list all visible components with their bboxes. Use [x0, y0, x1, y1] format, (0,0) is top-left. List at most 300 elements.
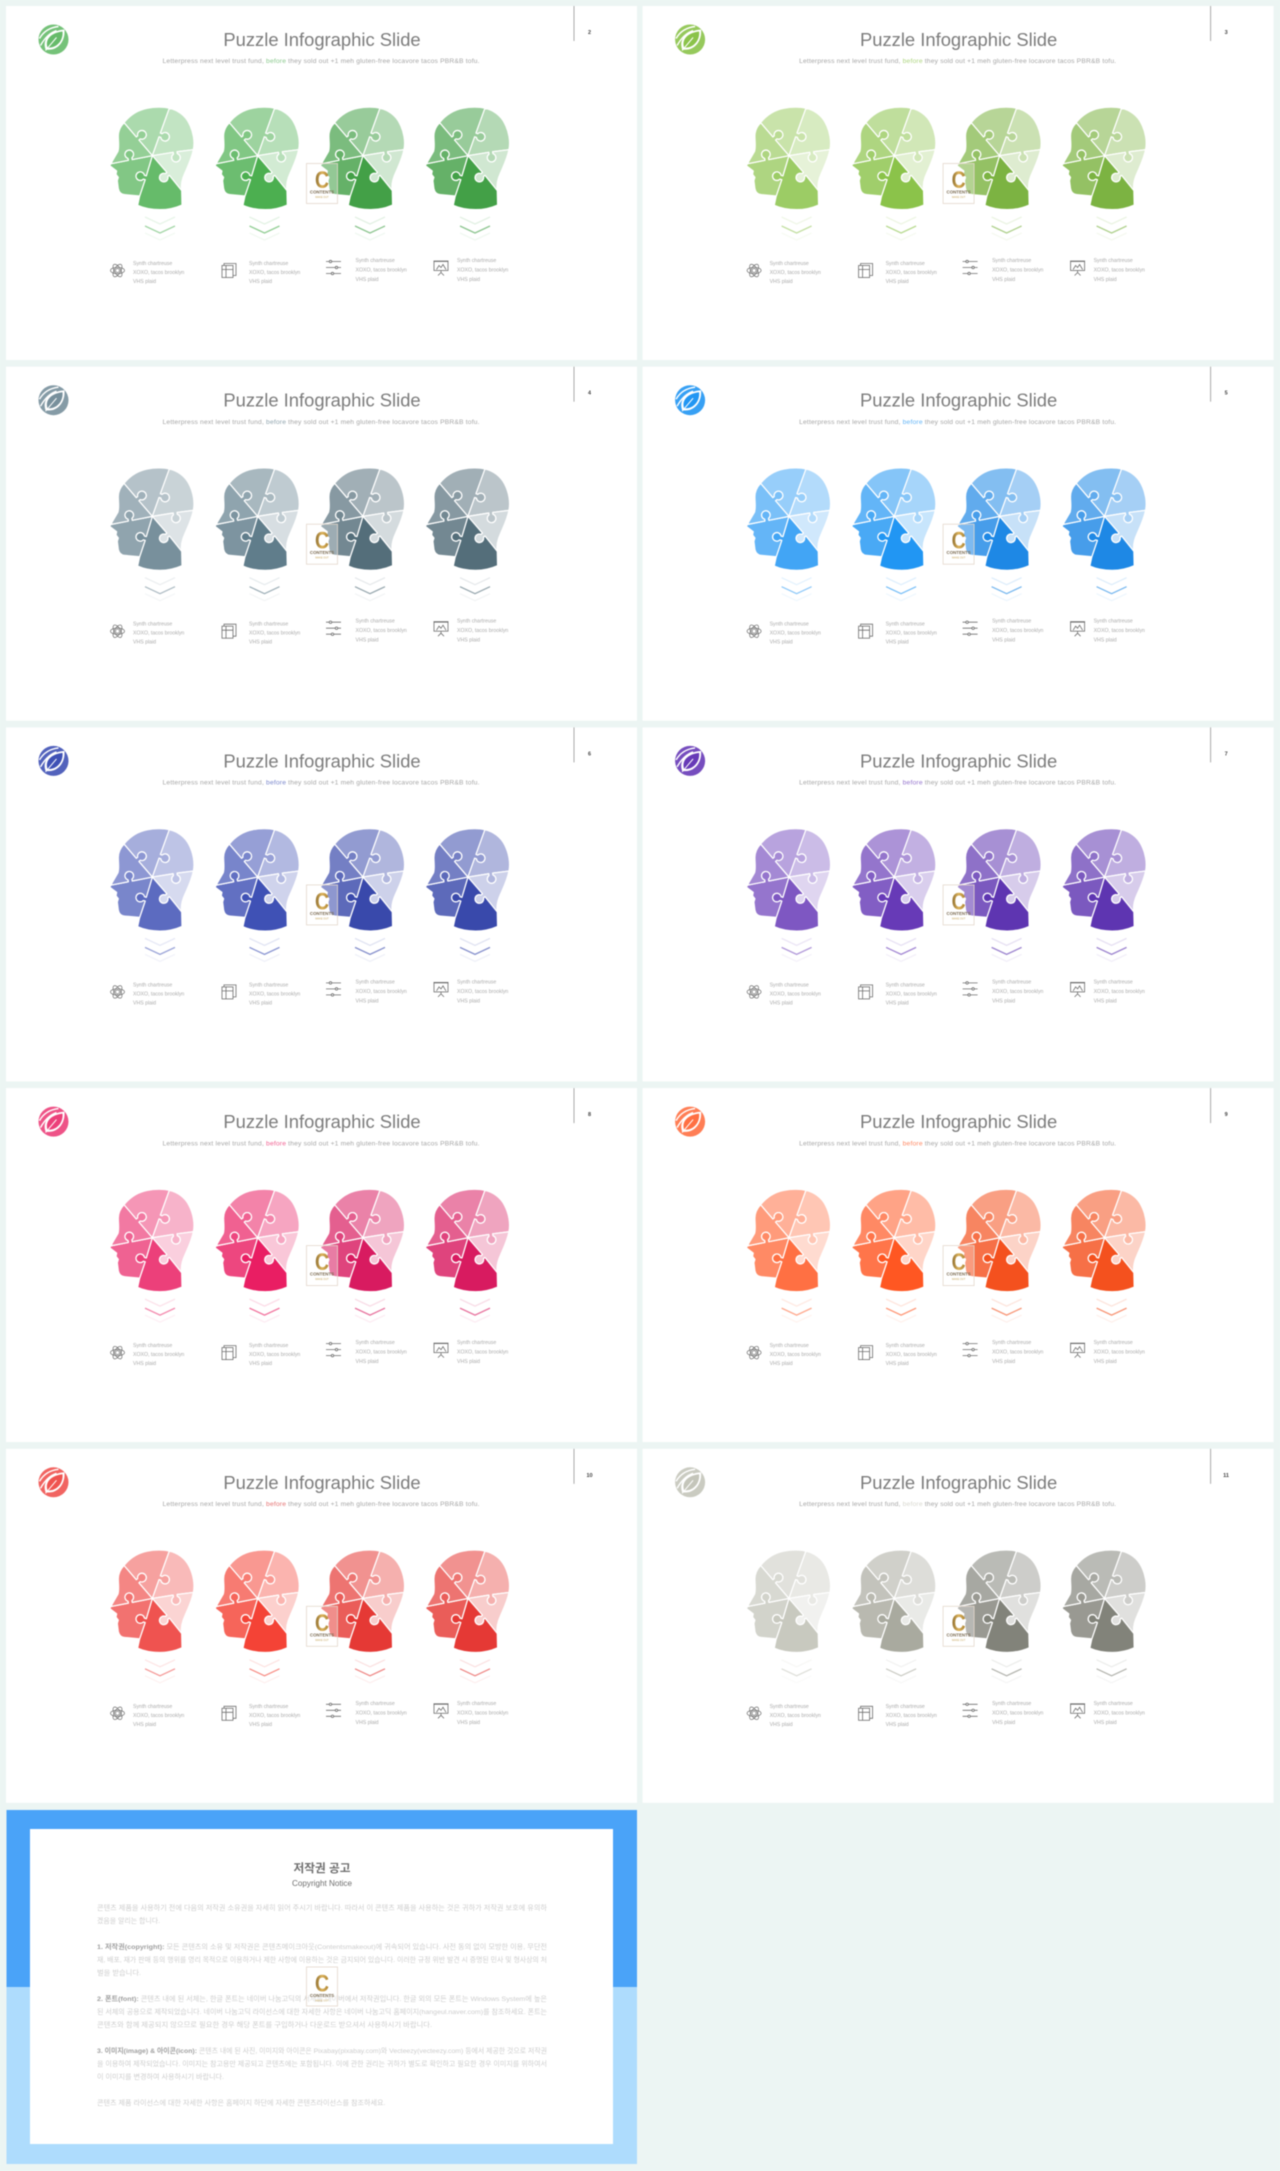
feature text 3: VHS plaid: [356, 1720, 379, 1726]
icon: leaf logo: [675, 1107, 705, 1137]
section 2 font: 2. 폰트(font): 콘텐츠 내에 된 서체는, 한글 폰트는 네이버 나눔고딕의 서체를 네이버에서 저작권입니다. 한글 외의 모든 폰트는 Windows System에 높은: [97, 1994, 547, 2003]
feature text 2: Synth chartreuse: [249, 982, 288, 988]
icon: presentation board: [1070, 1343, 1085, 1358]
feature text 3: Synth chartreuse: [356, 619, 395, 625]
feature text 2: XOXO, tacos brooklyn: [886, 1713, 937, 1719]
watermark: [943, 885, 974, 925]
head 3: [957, 829, 1041, 931]
section 1 copyright: 재, 배포, 재가 판매 등의 행위를 영리 목적으로 이용하거나 제한 사항에 이용하는 것은 금지되어 있습니다. 이러한 규정 위반 발견 시 증명된 민사 및 형사상의 처: [97, 1955, 547, 1964]
icon: presentation board: [434, 1704, 448, 1718]
panel: green slide, page 2: [6, 6, 637, 360]
subtitle: Letterpress next level trust fund, before they sold out +1 meh gluten-free locavore tacos PBR&B tofu.: [799, 1501, 1116, 1508]
subtitle: Letterpress next level trust fund, before they sold out +1 meh gluten-free locavore tacos PBR&B tofu.: [799, 780, 1116, 787]
title: Puzzle Infographic Slide: [860, 1472, 1057, 1493]
head 2: [215, 1189, 299, 1292]
feature text 2: XOXO, tacos brooklyn: [886, 1352, 937, 1358]
subtitle: Letterpress next level trust fund, before they sold out +1 meh gluten-free locavore tacos PBR&B tofu.: [799, 1140, 1116, 1147]
icon: atom: [747, 1706, 761, 1721]
head 1: [747, 1550, 831, 1652]
notice heading: 저작권 공고: [294, 1861, 351, 1875]
feature text 1: XOXO, tacos brooklyn: [770, 270, 821, 276]
head 1: [747, 829, 831, 931]
watermark: CONTENTS: [947, 1272, 971, 1277]
feature text 2: VHS plaid: [249, 640, 272, 646]
icon: atom: [747, 263, 761, 278]
panel: indigo slide, page 6: [6, 727, 637, 1081]
page number: 5: [1225, 391, 1228, 397]
icon: leaf logo: [675, 385, 705, 415]
section 3 image and icon: 3. 이미지(image) & 아이콘(icon): 콘텐츠 내에 된 사진, 이미지와 아이콘은 Pixabay(pixabay.com)와 Vecteezy(vecteezy.com) 등에서 제공한 것으로 저작권: [97, 2046, 547, 2055]
puzzle heads: [747, 1189, 1146, 1292]
feature text 2: VHS plaid: [886, 1361, 909, 1367]
icon: sliders: [326, 260, 341, 275]
icon: presentation board: [434, 261, 448, 276]
notice intro: 콘텐츠 제품을 사용하기 전에 다음의 저작권 소유권을 자세히 읽어 주시기 바랍니다. 따라서 이 콘텐츠 제품을 사용하는 것은 귀하가 저작권 보호에 유의하: [97, 1903, 548, 1912]
feature text 1: XOXO, tacos brooklyn: [133, 631, 184, 637]
feature text 3: XOXO, tacos brooklyn: [356, 1350, 407, 1356]
watermark: C: [952, 528, 966, 555]
watermark: CONTENTS: [947, 911, 971, 916]
feature text 1: VHS plaid: [133, 1361, 156, 1367]
feature text 3: Synth chartreuse: [992, 1340, 1031, 1346]
icon: atom: [747, 1345, 761, 1360]
watermark: [306, 885, 338, 925]
feature text 2: VHS plaid: [886, 279, 909, 285]
head 2: [852, 829, 936, 931]
feature text 2: Synth chartreuse: [886, 1343, 925, 1349]
icon: layers: [222, 1346, 236, 1360]
feature text 1: Synth chartreuse: [133, 1704, 172, 1710]
feature text 3: XOXO, tacos brooklyn: [992, 1350, 1044, 1356]
feature text 1: VHS plaid: [770, 279, 793, 285]
page marker bar: [574, 1449, 575, 1484]
head 4: [426, 829, 510, 931]
feature text 4: Synth chartreuse: [457, 1340, 496, 1346]
feature text 3: VHS plaid: [992, 998, 1015, 1004]
feature text 3: XOXO, tacos brooklyn: [992, 1710, 1044, 1716]
icon: leaf logo: [675, 746, 705, 776]
chevrons: [782, 1660, 1127, 1683]
title: Puzzle Infographic Slide: [860, 1111, 1057, 1132]
feature text 2: Synth chartreuse: [249, 622, 288, 628]
watermark: MAKE OUT: [315, 556, 329, 560]
section 1 copyright: 1. 저작권(copyright): 모든 콘텐츠의 소유 및 저작권은 콘텐츠메이크아웃(Contentsmakeout)에 귀속되어 있습니다. 사전 동의 없이 모방한 이용, 무단전: [97, 1942, 547, 1951]
feature text 1: Synth chartreuse: [133, 1343, 172, 1349]
icon: atom: [110, 263, 124, 278]
feature text 4: VHS plaid: [457, 277, 480, 283]
puzzle heads: [747, 107, 1146, 210]
feature text 2: VHS plaid: [249, 1722, 272, 1728]
subtitle: Letterpress next level trust fund, before they sold out +1 meh gluten-free locavore tacos PBR&B tofu.: [162, 58, 480, 65]
feature text 4: VHS plaid: [1094, 638, 1117, 644]
feature text 2: Synth chartreuse: [886, 1704, 925, 1710]
watermark: [306, 1606, 338, 1646]
head 1: [110, 1189, 194, 1292]
title: Puzzle Infographic Slide: [223, 1472, 421, 1493]
feature text 1: VHS plaid: [770, 640, 793, 646]
feature text 1: VHS plaid: [133, 1722, 156, 1728]
head 2: [852, 1550, 936, 1652]
feature text 2: Synth chartreuse: [886, 261, 925, 267]
watermark: MAKE OUT: [952, 195, 966, 199]
icon: sliders: [963, 621, 978, 635]
feature text 1: Synth chartreuse: [133, 982, 172, 988]
feature text 3: Synth chartreuse: [992, 1701, 1031, 1707]
head 4: [1062, 468, 1146, 570]
feature text 3: Synth chartreuse: [356, 979, 395, 985]
icon: layers: [859, 1706, 873, 1720]
icon: atom: [747, 984, 761, 1000]
feature text 4: VHS plaid: [1094, 277, 1117, 283]
watermark: MAKE OUT: [952, 916, 966, 920]
feature text 3: VHS plaid: [356, 998, 379, 1004]
watermark: C: [315, 167, 329, 194]
feature text 1: Synth chartreuse: [770, 622, 809, 628]
feature text 4: XOXO, tacos brooklyn: [457, 268, 508, 274]
watermark: C: [952, 167, 966, 194]
icon: leaf logo: [675, 1467, 705, 1497]
head 1: [747, 1189, 831, 1292]
head 4: [426, 1550, 510, 1652]
icon: sliders: [326, 1342, 341, 1357]
feature text 4: VHS plaid: [1094, 1359, 1117, 1365]
page marker bar: [1210, 1449, 1211, 1484]
feature text 1: Synth chartreuse: [770, 1343, 809, 1349]
chevrons: [145, 938, 490, 961]
feature text 2: XOXO, tacos brooklyn: [249, 1352, 300, 1358]
watermark: MAKE OUT: [315, 1998, 329, 2002]
icon: sliders: [963, 1703, 978, 1718]
icon: presentation board: [434, 622, 448, 636]
chevrons: [782, 578, 1127, 601]
feature text 1: VHS plaid: [133, 279, 156, 285]
head 4: [426, 468, 510, 570]
subtitle: Letterpress next level trust fund, before they sold out +1 meh gluten-free locavore tacos PBR&B tofu.: [162, 419, 480, 426]
icon: presentation board: [1070, 1704, 1085, 1718]
watermark: [943, 164, 974, 204]
watermark: MAKE OUT: [315, 916, 329, 920]
feature text 4: XOXO, tacos brooklyn: [457, 628, 508, 634]
icon: sliders: [326, 1703, 341, 1718]
watermark: CONTENTS: [310, 1993, 334, 1998]
feature text 4: XOXO, tacos brooklyn: [457, 989, 508, 995]
feature text 1: XOXO, tacos brooklyn: [133, 270, 184, 276]
icon: layers: [222, 1706, 236, 1720]
notice intro line 2: 겠음을 알리는 합니다.: [97, 1916, 160, 1925]
watermark: [306, 1967, 338, 2006]
feature text 4: XOXO, tacos brooklyn: [457, 1350, 508, 1356]
page marker bar: [1210, 367, 1211, 402]
icon: layers: [222, 985, 236, 999]
subtitle: Letterpress next level trust fund, before they sold out +1 meh gluten-free locavore tacos PBR&B tofu.: [162, 780, 480, 787]
feature text 1: Synth chartreuse: [770, 261, 809, 267]
icon: sliders: [326, 982, 341, 996]
head 4: [1062, 1550, 1146, 1652]
panel: purple slide, page 7: [643, 727, 1274, 1081]
feature text 2: XOXO, tacos brooklyn: [886, 631, 937, 637]
watermark: MAKE OUT: [952, 1277, 966, 1281]
head 4: [1062, 1189, 1146, 1292]
feature text 3: VHS plaid: [992, 1720, 1015, 1726]
head 1: [110, 1550, 194, 1652]
panel: blue slide, page 5: [643, 367, 1274, 721]
page number: 2: [588, 30, 591, 36]
page marker bar: [1210, 6, 1211, 41]
feature text 2: Synth chartreuse: [886, 982, 925, 988]
notice closing line: 콘텐츠 제품 라이선스에 대한 자세한 사항은 홈페이지 하단에 자세한 콘텐츠라이선스를 참조하세요.: [97, 2098, 386, 2107]
feature text 3: Synth chartreuse: [992, 258, 1031, 264]
head 1: [747, 468, 831, 570]
watermark: CONTENTS: [310, 1632, 334, 1637]
chevrons: [782, 938, 1127, 961]
puzzle heads: [747, 468, 1146, 570]
head 2: [215, 829, 299, 931]
watermark: MAKE OUT: [952, 556, 966, 560]
section 2 font: 된 서체의 공용으로 제작되었습니다. 네이버 나눔고딕 라이선스에 대한 자세한 사항은 네이버 나눔고딕 홈페이지(hangeul.naver.com)를 참조하세요. 폰트는: [97, 2007, 547, 2016]
icon: atom: [110, 1706, 124, 1721]
head 3: [957, 1189, 1041, 1292]
feature text 3: XOXO, tacos brooklyn: [992, 989, 1044, 995]
feature text 3: VHS plaid: [356, 277, 379, 283]
title: Puzzle Infographic Slide: [223, 1111, 421, 1132]
chevrons: [145, 1299, 490, 1322]
feature text 2: VHS plaid: [886, 1722, 909, 1728]
icon: atom: [110, 1345, 124, 1360]
subtitle: Letterpress next level trust fund, before they sold out +1 meh gluten-free locavore tacos PBR&B tofu.: [162, 1140, 480, 1147]
icon: presentation board: [1070, 622, 1085, 636]
panel: pink slide, page 8: [6, 1088, 637, 1442]
head 3: [321, 1189, 405, 1292]
head 4: [1062, 829, 1146, 931]
page number: 10: [586, 1473, 593, 1479]
feature text 4: Synth chartreuse: [457, 1701, 496, 1707]
feature text 1: Synth chartreuse: [770, 982, 809, 988]
page marker bar: [574, 6, 575, 41]
icon: presentation board: [434, 1343, 448, 1358]
feature text 1: VHS plaid: [133, 1000, 156, 1006]
head 1: [747, 107, 831, 210]
icon: layers: [859, 985, 873, 999]
head 3: [321, 829, 405, 931]
icon: atom: [110, 984, 124, 1000]
watermark: C: [315, 888, 329, 915]
watermark: CONTENTS: [947, 1632, 971, 1637]
watermark: C: [315, 1249, 329, 1276]
head 2: [852, 1189, 936, 1292]
panel: light green slide, page 3: [643, 6, 1274, 360]
feature text 1: XOXO, tacos brooklyn: [133, 1352, 184, 1358]
feature text 2: XOXO, tacos brooklyn: [249, 631, 300, 637]
watermark: C: [952, 888, 966, 915]
feature text 1: XOXO, tacos brooklyn: [133, 1713, 184, 1719]
feature text 4: Synth chartreuse: [457, 619, 496, 625]
feature text 4: XOXO, tacos brooklyn: [1094, 1710, 1145, 1716]
head 2: [215, 1550, 299, 1652]
icon: presentation board: [1070, 261, 1085, 276]
icon: sliders: [963, 982, 978, 996]
feature text 4: Synth chartreuse: [1094, 619, 1133, 625]
head 4: [426, 107, 510, 210]
title: Puzzle Infographic Slide: [223, 750, 421, 771]
feature text 4: Synth chartreuse: [457, 258, 496, 264]
feature text 2: Synth chartreuse: [249, 1704, 288, 1710]
watermark: CONTENTS: [310, 550, 334, 555]
subtitle: Letterpress next level trust fund, before they sold out +1 meh gluten-free locavore tacos PBR&B tofu.: [799, 419, 1116, 426]
head 3: [957, 468, 1041, 570]
feature text 1: VHS plaid: [770, 1361, 793, 1367]
icon: layers: [859, 1346, 873, 1360]
feature text 4: Synth chartreuse: [1094, 258, 1133, 264]
feature text 4: VHS plaid: [457, 1720, 480, 1726]
feature text 3: XOXO, tacos brooklyn: [356, 989, 407, 995]
panel: blue-gray slide, page 4: [6, 367, 637, 721]
page number: 4: [588, 391, 592, 397]
watermark: [943, 524, 974, 564]
feature text 1: Synth chartreuse: [133, 261, 172, 267]
chevrons: [782, 1299, 1127, 1322]
head 1: [110, 829, 194, 931]
section 1 copyright: [97, 1942, 547, 1977]
feature text 3: XOXO, tacos brooklyn: [356, 628, 407, 634]
title: Puzzle Infographic Slide: [860, 750, 1057, 771]
head 1: [110, 107, 194, 210]
section 2 font: [97, 1994, 547, 2029]
feature text 2: VHS plaid: [249, 279, 272, 285]
page number: 8: [588, 1112, 591, 1118]
feature text 2: Synth chartreuse: [886, 622, 925, 628]
feature text 4: Synth chartreuse: [1094, 1340, 1133, 1346]
feature text 1: XOXO, tacos brooklyn: [770, 1352, 821, 1358]
page number: 7: [1225, 751, 1228, 757]
feature text 3: Synth chartreuse: [356, 1340, 395, 1346]
puzzle heads: [110, 468, 510, 570]
feature text 4: VHS plaid: [1094, 1720, 1117, 1726]
feature text 2: XOXO, tacos brooklyn: [886, 270, 937, 276]
icon: leaf logo: [38, 24, 68, 54]
feature text 3: VHS plaid: [992, 638, 1015, 644]
icon: presentation board: [1070, 982, 1085, 997]
subtitle: Letterpress next level trust fund, before they sold out +1 meh gluten-free locavore tacos PBR&B tofu.: [162, 1501, 480, 1508]
feature text 4: XOXO, tacos brooklyn: [1094, 1350, 1145, 1356]
feature text 3: XOXO, tacos brooklyn: [356, 1710, 407, 1716]
watermark: MAKE OUT: [315, 1277, 329, 1281]
title: Puzzle Infographic Slide: [860, 390, 1057, 411]
feature text 4: VHS plaid: [457, 1359, 480, 1365]
feature text 2: XOXO, tacos brooklyn: [249, 991, 300, 997]
head 3: [321, 1550, 405, 1652]
puzzle heads: [747, 1550, 1146, 1652]
panel: orange slide, page 9: [643, 1088, 1274, 1442]
feature text 4: VHS plaid: [1094, 998, 1117, 1004]
watermark: CONTENTS: [310, 911, 334, 916]
feature text 2: XOXO, tacos brooklyn: [886, 991, 937, 997]
watermark: CONTENTS: [947, 190, 971, 194]
feature text 2: VHS plaid: [249, 1361, 272, 1367]
feature text 4: Synth chartreuse: [1094, 1701, 1133, 1707]
section 3 image and icon: 이 이미지를 변경하여 사용하시기 바랍니다.: [97, 2072, 224, 2081]
feature text 4: Synth chartreuse: [1094, 979, 1133, 985]
notice subheading: Copyright Notice: [292, 1878, 352, 1888]
feature text 2: Synth chartreuse: [249, 1343, 288, 1349]
feature text 2: XOXO, tacos brooklyn: [249, 270, 300, 276]
feature text 1: Synth chartreuse: [133, 622, 172, 628]
section 1 copyright: 벌을 받습니다.: [97, 1968, 141, 1977]
watermark: [306, 524, 338, 564]
feature text 1: XOXO, tacos brooklyn: [770, 1713, 821, 1719]
watermark: [306, 1246, 338, 1286]
feature text 3: XOXO, tacos brooklyn: [356, 268, 407, 274]
page number: 11: [1223, 1473, 1229, 1479]
feature text 1: VHS plaid: [133, 640, 156, 646]
icon: layers: [859, 264, 873, 278]
head 2: [852, 468, 936, 570]
watermark: C: [952, 1249, 966, 1276]
icon: leaf logo: [675, 24, 705, 54]
puzzle heads: [110, 1550, 510, 1652]
page marker bar: [1210, 727, 1211, 762]
panel: red slide, page 10: [6, 1449, 637, 1803]
feature text 4: XOXO, tacos brooklyn: [457, 1710, 508, 1716]
watermark: MAKE OUT: [315, 1638, 329, 1642]
section 3 image and icon: 을 이용하여 제작되었습니다. 이미지는 참고용만 제공되고 콘텐츠에는 포함됩니다. 이에 관한 권리는 귀하가 별도로 확인하고 필요한 경우 이미지를 위하여서: [97, 2059, 547, 2068]
title: Puzzle Infographic Slide: [860, 29, 1057, 50]
chevrons: [782, 217, 1127, 240]
icon: sliders: [963, 260, 978, 275]
page number: 6: [588, 751, 591, 757]
page marker bar: [574, 727, 575, 762]
head 3: [957, 107, 1041, 210]
head 3: [321, 107, 405, 210]
feature text 3: VHS plaid: [356, 1359, 379, 1365]
feature text 1: XOXO, tacos brooklyn: [770, 631, 821, 637]
icon: layers: [222, 624, 236, 638]
feature text 4: VHS plaid: [457, 638, 480, 644]
icon: sliders: [963, 1342, 978, 1357]
chevrons: [145, 578, 490, 601]
feature text 3: XOXO, tacos brooklyn: [992, 268, 1044, 274]
watermark: C: [315, 1970, 329, 1998]
feature text 3: VHS plaid: [992, 277, 1015, 283]
icon: atom: [110, 624, 124, 639]
icon: layers: [859, 624, 873, 638]
icon: presentation board: [434, 982, 448, 997]
icon: sliders: [326, 621, 341, 635]
title: Puzzle Infographic Slide: [223, 29, 421, 50]
page number: 9: [1225, 1112, 1228, 1118]
icon: atom: [747, 624, 761, 639]
feature text 2: XOXO, tacos brooklyn: [249, 1713, 300, 1719]
head 2: [215, 107, 299, 210]
feature text 4: XOXO, tacos brooklyn: [1094, 628, 1145, 634]
head 3: [957, 1550, 1041, 1652]
title: Puzzle Infographic Slide: [223, 390, 421, 411]
feature text 1: VHS plaid: [770, 1722, 793, 1728]
page marker bar: [1210, 1088, 1211, 1123]
feature text 4: XOXO, tacos brooklyn: [1094, 989, 1145, 995]
watermark: C: [315, 528, 329, 555]
feature text 4: Synth chartreuse: [457, 979, 496, 985]
feature text 2: Synth chartreuse: [249, 261, 288, 267]
watermark: CONTENTS: [310, 1272, 334, 1277]
head 2: [215, 468, 299, 570]
feature text 3: XOXO, tacos brooklyn: [992, 628, 1044, 634]
watermark: [943, 1606, 974, 1646]
feature text 1: XOXO, tacos brooklyn: [770, 991, 821, 997]
panel: copyright notice: [6, 1810, 637, 2164]
watermark: MAKE OUT: [952, 1638, 966, 1642]
chevrons: [145, 217, 490, 240]
chevrons: [145, 1660, 490, 1683]
